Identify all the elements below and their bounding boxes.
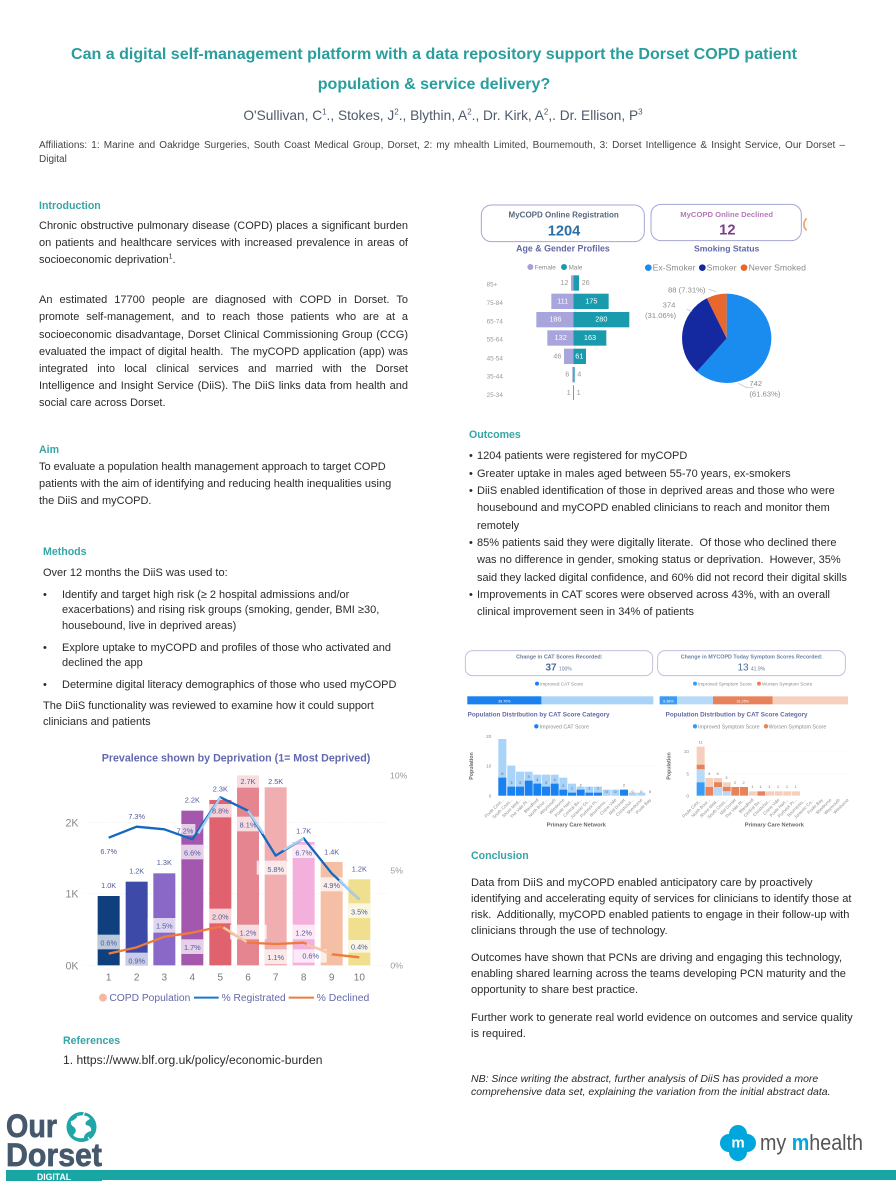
bar chart: Purbeck Pr...: [579, 798, 600, 819]
text: methods intro: Over 12 months the DiiS was used to:: [43, 567, 228, 579]
bar chart: Sherborne: [626, 797, 644, 815]
bar chart: 2: [743, 780, 746, 785]
text: conclusion: Further work to generate real world evidence on outcomes and service quality: [471, 1012, 853, 1024]
label backings: [98, 776, 370, 965]
bar chart: 20: [486, 734, 492, 739]
heading: age and gender: Age & Gender Profiles: [516, 244, 610, 254]
list: outcomes: remotely: [477, 520, 519, 532]
legend: % Declined: [317, 993, 369, 1004]
list: methods bullets: Determine digital literacy demographics of those who used myCOPD: [62, 678, 396, 690]
chart title: Prevalence shown by Deprivation (1= Most Deprived): [102, 753, 371, 765]
bar chart: 3: [510, 780, 513, 785]
progress bar: 9.38%: [663, 699, 674, 703]
bar chart: North Bour...: [690, 798, 711, 818]
progress bar: 31.25%: [736, 699, 750, 703]
text: references: 1. https://www.blf.org.uk/policy/economic-burden: [63, 1053, 322, 1067]
bar chart: 5: [686, 771, 689, 776]
bar chart: Blandford: [523, 797, 540, 814]
list: methods bullets: •: [43, 678, 47, 690]
population pyramid: 85+: [487, 282, 498, 289]
data labels: 1.4K: [324, 847, 339, 856]
bar chart: Weymouth: [539, 797, 557, 816]
bar chart: South Coas...: [706, 798, 728, 820]
text: aim: patients with the aim of identifying and reducing health inequalities using: [39, 478, 391, 490]
logo: my mhealth: m: [731, 1134, 745, 1152]
authors: O'Sullivan, C1., Stokes, J2., Blythin, A2., Dr. Kirk, A2,. Dr. Ellison, P3: [243, 107, 643, 123]
data labels: 2.3K: [213, 785, 228, 794]
heading: references: References: [63, 1035, 120, 1047]
chart: prevalence by deprivation: [65, 753, 408, 1004]
dashboard: change in symptom scores: [657, 650, 850, 829]
bar chart: 2: [623, 783, 626, 788]
bar chart: 2: [580, 783, 583, 788]
population pyramid: 1: [577, 388, 581, 397]
bar chart: Weymouth: [823, 797, 841, 816]
x axis: 9: [329, 973, 335, 984]
legend: smoking: Never Smoked: [749, 263, 806, 273]
note: comprehensive data set, explaining the variation from the initial abstract data.: [471, 1086, 831, 1098]
x axis: [106, 973, 365, 984]
bar chart: 0: [632, 789, 635, 794]
heading: aim: Aim: [39, 444, 59, 456]
text: conclusion: [471, 877, 853, 1040]
bar chart: 0: [606, 789, 609, 794]
data labels: 1.5%: [156, 922, 173, 931]
x axis: 4: [190, 973, 196, 984]
bar chart: 10: [684, 749, 689, 754]
text: aim: [39, 461, 391, 507]
data labels: 8.8%: [212, 806, 229, 815]
heading: outcomes: Outcomes: [469, 429, 521, 441]
bar chart: Mid Dorset: [719, 797, 738, 816]
bar chart: 4: [536, 777, 539, 782]
text: conclusion: opportunity to share best practice.: [471, 984, 638, 996]
list: outcomes: •: [469, 589, 473, 601]
population pyramid: 75-84: [487, 300, 503, 307]
list: methods bullets: housebound, live in deprived areas): [62, 620, 236, 632]
bar chart: 1: [571, 785, 574, 790]
bar chart: Population: [469, 752, 475, 780]
logo: Our Dorset Digital: Our: [6, 1108, 57, 1144]
population pyramid: 132: [555, 333, 567, 342]
list: methods bullets: exacerbations) and rising risk groups (smoking, gender, BMI ≥30,: [62, 604, 379, 616]
legend: % Registrated: [222, 993, 286, 1004]
population pyramid: 111: [557, 296, 568, 305]
bar chart: 1: [795, 784, 798, 789]
left axis: 1K: [65, 888, 79, 900]
list: outcomes: •: [469, 450, 473, 462]
bar chart: 0: [614, 789, 617, 794]
card: CAT scores recorded: Change in CAT Scores Recorded:: [516, 654, 603, 660]
population pyramid: 175: [585, 296, 597, 305]
data labels: 2.0%: [212, 912, 229, 921]
population pyramid: 186: [549, 315, 561, 324]
bar chart: 11: [699, 739, 704, 744]
population pyramid: 4: [577, 370, 581, 379]
right axis: 10%: [390, 771, 408, 781]
bar chart: Mid Dorset: [608, 797, 627, 816]
bar chart: Shore Med...: [699, 798, 720, 819]
bar chart: Bournemo...: [588, 798, 609, 818]
data labels: 0.4%: [351, 942, 368, 951]
bar chart: Poole Bay: [806, 797, 824, 815]
list: outcomes: 1204 patients were registered for myCOPD: [477, 450, 687, 462]
logo: Our Dorset Digital: Dorset: [6, 1137, 102, 1173]
bar chart: Population: [667, 752, 673, 780]
bar chart: Crane Vale: [762, 797, 781, 816]
text: introduction: socioeconomic disadvantage, Dorset Clinical Commissioning Group (CCG): [39, 329, 408, 341]
x axis: 10: [354, 973, 365, 984]
bar chart: 3: [545, 780, 548, 785]
bar chart: Wimborne: [832, 797, 850, 815]
population pyramid: 55-64: [487, 337, 503, 344]
footer bar: [6, 1170, 896, 1180]
bar chart: 1: [786, 784, 789, 789]
bar chart: 0: [686, 793, 689, 798]
bar chart: 1: [768, 784, 771, 789]
legend: [693, 681, 813, 686]
card: registration: 1204: [548, 223, 581, 239]
card: symptom scores recorded: 41.9%: [751, 666, 766, 672]
list: methods bullets: Identify and target high risk (≥ 2 hospital admissions and/or: [62, 588, 349, 600]
progress bar: 39.70%: [498, 699, 511, 703]
bar chart: 1: [777, 784, 780, 789]
left axis: [65, 817, 79, 972]
bar chart: 4: [554, 777, 557, 782]
text: introduction: promote self-management, and to reach those patients who are at a: [39, 311, 408, 323]
population pyramid: 25-34: [487, 392, 503, 399]
population pyramid: 1: [567, 388, 571, 397]
text: introduction: socioeconomic deprivation1.: [39, 253, 176, 266]
card: declined: 12: [719, 222, 735, 238]
logo: Our Dorset Digital: [6, 1108, 102, 1183]
pie chart: smoking status: 742: [749, 379, 762, 388]
x axis: 6: [245, 973, 251, 984]
bar chart: North Bour...: [527, 798, 548, 818]
bar chart: 2: [562, 783, 565, 788]
bar chart: Central Bo...: [742, 798, 763, 818]
data labels: 1.0K: [101, 881, 116, 890]
bar chart: Shore Med...: [501, 798, 522, 819]
text: introduction: evaluated the impact of digital health. The myCOPD application (app) was: [39, 346, 408, 358]
data labels: 4.9%: [323, 881, 341, 890]
bar chart: Poole Hart...: [553, 798, 574, 818]
list: methods bullets: •: [43, 642, 47, 654]
bar chart: 0: [640, 789, 643, 794]
legend: smoking: Ex-Smoker: [653, 263, 696, 273]
list: methods bullets: declined the app: [62, 657, 143, 669]
card: CAT scores recorded: 37: [545, 662, 557, 673]
card: symptom scores recorded: Change in MYCOPD Today Symptom Scores Recorded:: [681, 654, 823, 660]
population pyramid: 6: [565, 370, 569, 379]
bar chart: 6: [501, 771, 504, 776]
x axis: 3: [162, 973, 168, 984]
affiliations: Digital: [39, 154, 67, 165]
text: introduction: integrated into local clinical services and married with the Dorset: [39, 363, 408, 375]
bar chart: 1: [751, 784, 754, 789]
legend: COPD Population: [109, 993, 190, 1004]
bar chart: Crane Vale: [599, 797, 618, 816]
bar chart: Central Bo...: [562, 798, 583, 818]
bar chart: 10: [486, 764, 492, 769]
data labels: 5.8%: [267, 865, 285, 874]
x axis: 8: [301, 973, 307, 984]
population pyramid: 45-54: [487, 355, 503, 362]
x axis: 5: [218, 973, 224, 984]
population pyramid: 61: [575, 352, 583, 361]
bar chart: Primary Care Network: [547, 823, 607, 829]
bar chart: 0: [489, 793, 492, 798]
right axis: 5%: [390, 866, 403, 876]
bar chart: 1: [760, 784, 763, 789]
population pyramid: 12: [560, 278, 568, 287]
population pyramid: [487, 275, 629, 400]
list: outcomes: 85% patients said they were digitally literate. Of those who declined there: [477, 537, 837, 549]
data labels: 6.6%: [184, 848, 201, 857]
data labels: 1.2K: [352, 865, 367, 874]
heading: introduction: Introduction: [39, 200, 101, 212]
card: registration: [481, 205, 644, 242]
data labels: 1.7K: [296, 827, 311, 836]
bar chart: Poole Hart...: [768, 798, 789, 818]
note: NB: Since writing the abstract, further analysis of DiiS has provided a more: [471, 1073, 818, 1085]
note: [471, 1073, 831, 1098]
heading: Population Distribution by CAT Score Category: [468, 712, 610, 719]
data labels: 1.2%: [295, 928, 313, 937]
data labels: 2.2K: [185, 796, 200, 805]
card: registration: MyCOPD Online Registration: [509, 211, 619, 220]
progress bar: [660, 696, 848, 704]
list: outcomes: [469, 450, 847, 618]
population pyramid: 35-44: [487, 374, 503, 381]
bar chart: Jurassic Co...: [793, 798, 815, 820]
text: introduction: [39, 220, 408, 409]
legend: Improved Symptom Score: [698, 681, 752, 686]
affiliations: [39, 140, 846, 165]
legend: gender: [527, 264, 583, 271]
data labels: 2.5K: [268, 777, 283, 786]
data labels: 6.7%: [100, 847, 118, 856]
text: methods closing: The DiiS functionality was reviewed to examine how it could support: [43, 700, 374, 712]
card: declined: [651, 204, 807, 241]
text: introduction: on patients and healthcare services with increased prevalence in areas of: [39, 237, 408, 249]
list: methods bullets: [43, 588, 396, 690]
title: population & service delivery?: [318, 75, 550, 93]
bars: [98, 776, 370, 965]
pie chart: smoking status: [645, 286, 781, 399]
data labels: 1.1%: [267, 953, 285, 962]
population pyramid: 46: [553, 352, 561, 361]
bar chart: 1: [588, 785, 591, 790]
data labels: 0.9%: [128, 956, 146, 965]
card: declined: MyCOPD Online Declined: [680, 210, 773, 219]
data labels: 3.5%: [351, 908, 368, 917]
line: percent registered: [109, 797, 359, 899]
legend: gender: Female: [535, 264, 556, 271]
bar chart: 1: [597, 785, 600, 790]
list: outcomes: housebound and myCOPD enabled clinicians to reach and monitor them: [477, 502, 830, 514]
data labels: 1.2K: [129, 866, 144, 875]
legend: smoking: [645, 263, 806, 273]
bar chart: 4: [708, 771, 711, 776]
dashboard: registration, age and smoking: [480, 204, 808, 400]
right axis: [390, 771, 408, 971]
bar chart: Purbeck Pr...: [777, 798, 798, 819]
data labels: 0.6%: [100, 938, 118, 947]
x axis: 1: [106, 973, 112, 984]
list: methods bullets: •: [43, 588, 47, 600]
bar chart: South Coas...: [491, 798, 513, 820]
logo: Our Dorset Digital: DIGITAL: [37, 1172, 71, 1183]
left axis: 0K: [65, 960, 79, 972]
text: introduction: Chronic obstructive pulmonary disease (COPD) places a significant burden: [39, 220, 408, 232]
legend: [693, 724, 826, 730]
affiliations: Affiliations: 1: Marine and Oakridge Surgeries, South Coast Medical Group, Dorset, 2: my mhealth Limited, Bournemouth, 3: Dorset Intelligence & Insight Service, Our Dorset –: [39, 140, 845, 151]
bar chart: Jurassic Co...: [569, 798, 591, 820]
pie chart: smoking status: (61.63%): [749, 390, 781, 399]
pie chart: smoking status: (31.06%): [645, 311, 677, 320]
bar chart: Sherborne: [815, 797, 833, 815]
legend: Worsen Symptom Score: [762, 681, 813, 686]
legend: smoking: Smoker: [707, 263, 737, 273]
card: symptom scores recorded: 13: [737, 662, 749, 673]
data labels: 1.2%: [240, 928, 257, 937]
bar chart: [667, 739, 850, 829]
legend: Improved CAT Score: [540, 681, 583, 686]
list: outcomes: •: [469, 537, 473, 549]
bar chart: [469, 734, 657, 829]
legend: Worsen Symptom Score: [769, 724, 826, 730]
logo: my mhealth: my mhealth: [760, 1130, 863, 1155]
dashboard: change in CAT scores: [464, 650, 656, 829]
population pyramid: 163: [584, 333, 596, 342]
text: methods closing: clinicians and patients: [43, 716, 151, 728]
text: aim: the DiiS and myCOPD.: [39, 495, 151, 507]
title: Can a digital self-management platform with a data repository support the Dorset COPD patient: [71, 45, 797, 63]
heading: methods: Methods: [43, 546, 87, 558]
pie chart: smoking status: 88 (7.31%): [668, 286, 706, 295]
bar chart: Bournemo...: [786, 798, 806, 818]
bar chart: 3: [725, 775, 728, 780]
card: symptom scores recorded: [658, 651, 845, 676]
list: outcomes: Greater uptake in males aged between 55-70 years, ex-smokers: [477, 468, 791, 480]
x axis: 2: [134, 973, 140, 984]
population pyramid: 65-74: [487, 318, 503, 325]
text: methods closing: [43, 700, 374, 728]
text: aim: To evaluate a population health management approach to target COPD: [39, 461, 386, 473]
text: conclusion: Outcomes have shown that PCNs are driving and engaging this technology,: [471, 952, 842, 964]
list: outcomes: said they lacked digital confidence, and 60% did not record their digital skills: [477, 572, 847, 584]
bar chart: The Vale Pl...: [509, 798, 531, 819]
data labels: 1.3K: [157, 858, 172, 867]
bar chart: 3: [519, 780, 522, 785]
bar chart: Christchur...: [615, 798, 635, 817]
bar chart: Christchur...: [752, 798, 772, 817]
list: outcomes: was no difference in gender, smoking status or deprivation. However, 35%: [477, 554, 841, 566]
right axis: 0%: [390, 961, 403, 971]
text: conclusion: is required.: [471, 1028, 526, 1040]
text: introduction: An estimated 17700 people are diagnosed with COPD in Dorset. To: [39, 294, 408, 306]
data labels: 7.2%: [177, 826, 194, 835]
text: introduction: social care across Dorset.: [39, 397, 166, 409]
text: conclusion: clinicians through the use of technology.: [471, 925, 668, 937]
list: outcomes: •: [469, 485, 473, 497]
bar chart: 4: [717, 771, 720, 776]
heading: conclusion: Conclusion: [471, 850, 529, 862]
data labels: [100, 777, 368, 965]
bar chart: 5: [528, 774, 531, 779]
list: methods bullets: Explore uptake to myCOPD and profiles of those who activated and: [62, 642, 391, 654]
text: introduction: Intelligence and Insight Service (DiiS). The DiiS links data from health and: [39, 380, 408, 392]
pie chart: smoking status: 374: [663, 300, 676, 309]
text: conclusion: identifying and accelerating equity of services for clinicians to identify those at: [471, 893, 851, 905]
text: conclusion: risk. Additionally, myCOPD enabled patients to engage in their follow-up with: [471, 909, 849, 921]
left axis: 2K: [65, 817, 79, 829]
data labels: 0.6%: [302, 952, 320, 961]
bar chart: Primary Care Network: [745, 823, 805, 829]
line: percent declined: [109, 927, 359, 957]
data labels: 8.1%: [240, 820, 257, 829]
heading: Population Distribution by CAT Score Category: [666, 712, 808, 719]
data labels: 7.3%: [128, 812, 146, 821]
x axis: 7: [273, 973, 279, 984]
data labels: 1.7%: [184, 943, 201, 952]
bar chart: The Vale Pl...: [724, 798, 746, 819]
legend: Improved Symptom Score: [698, 724, 760, 730]
legend: gender: Male: [569, 264, 583, 271]
list: outcomes: clinical improvement seen in 34% of patients: [477, 606, 694, 618]
list: outcomes: •: [469, 468, 473, 480]
list: outcomes: DiiS enabled identification of those in deprived areas and those who were: [477, 485, 835, 497]
population pyramid: 280: [595, 315, 607, 324]
data labels: 6.7%: [295, 848, 313, 857]
text: conclusion: Data from DiiS and myCOPD enabled anticipatory care by proactively: [471, 877, 813, 889]
logo: my mhealth: [720, 1125, 863, 1161]
title: [71, 45, 797, 93]
bar chart: Poole Cent...: [483, 798, 505, 819]
legend: [99, 993, 369, 1004]
heading: smoking: Smoking Status: [694, 244, 760, 254]
population pyramid: 26: [582, 278, 590, 287]
bar chart: 0: [649, 789, 652, 794]
text: conclusion: enabling shared learning across the teams developing PCN maturity and the: [471, 968, 846, 980]
data labels: 2.7K: [240, 777, 256, 786]
progress bar: [467, 696, 653, 704]
bar chart: Poole Bay: [635, 797, 653, 815]
bar chart: Wimborne: [548, 797, 566, 815]
bar chart: Blandford: [738, 797, 755, 814]
bar chart: Poole Cent...: [681, 798, 702, 819]
list: outcomes: Improvements in CAT scores were observed across 43%, with an overall: [477, 589, 830, 601]
bar chart: 2: [734, 780, 737, 785]
card: CAT scores recorded: [465, 651, 653, 676]
legend: Improved CAT Score: [540, 724, 589, 730]
card: CAT scores recorded: 100%: [559, 666, 572, 672]
